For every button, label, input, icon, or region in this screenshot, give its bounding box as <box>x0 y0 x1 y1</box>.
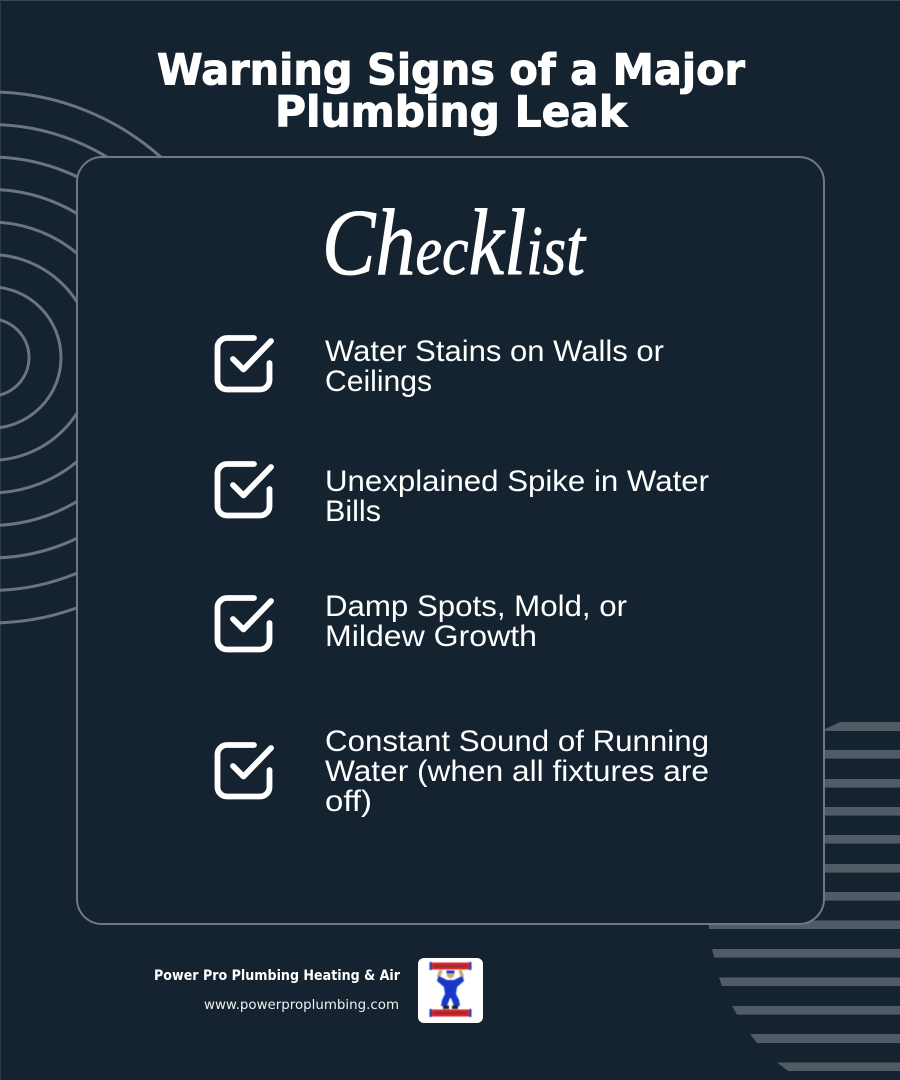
footer: company name: Power Pro Plumbing Heating & Air <box>154 968 400 984</box>
text: item 1 <box>325 335 664 398</box>
text: item 1: Ceilings <box>325 365 432 398</box>
icon: checkbox 2 <box>218 464 271 516</box>
icon: checkbox 3 <box>218 598 271 650</box>
text: item 4 <box>325 725 709 818</box>
icon: checkbox 4 <box>218 745 271 796</box>
text: item 1: Water Stains on Walls or <box>325 335 664 368</box>
text: item 2: Bills <box>325 495 381 528</box>
checklist item 1 <box>218 335 664 398</box>
text: item 3: Mildew Growth <box>325 620 537 653</box>
text: item 4: Constant Sound of Running <box>325 725 709 758</box>
title: Plumbing Leak <box>275 88 628 138</box>
text: item 2: Unexplained Spike in Water <box>325 465 709 498</box>
text: item 4: Water (when all fixtures are <box>325 755 709 788</box>
panel: checklist <box>77 157 824 924</box>
text: item 2 <box>325 465 709 528</box>
icon: company logo <box>418 958 483 1023</box>
checklist item 2 <box>218 464 709 528</box>
title: Warning Signs of a Major <box>157 46 746 96</box>
decorative concentric rings <box>0 92 250 623</box>
checklist item 3 <box>218 590 627 653</box>
text: item 3: Damp Spots, Mold, or <box>325 590 627 623</box>
decorative stripes <box>708 722 900 1071</box>
footer: website: www.powerproplumbing.com <box>204 997 399 1013</box>
text: item 3 <box>325 590 627 653</box>
heading: Checklist: Checklist <box>322 191 587 295</box>
checklist item 4 <box>218 725 709 818</box>
title <box>157 46 746 138</box>
icon: checkbox 1 <box>218 338 271 390</box>
text: item 4: off) <box>325 785 372 818</box>
